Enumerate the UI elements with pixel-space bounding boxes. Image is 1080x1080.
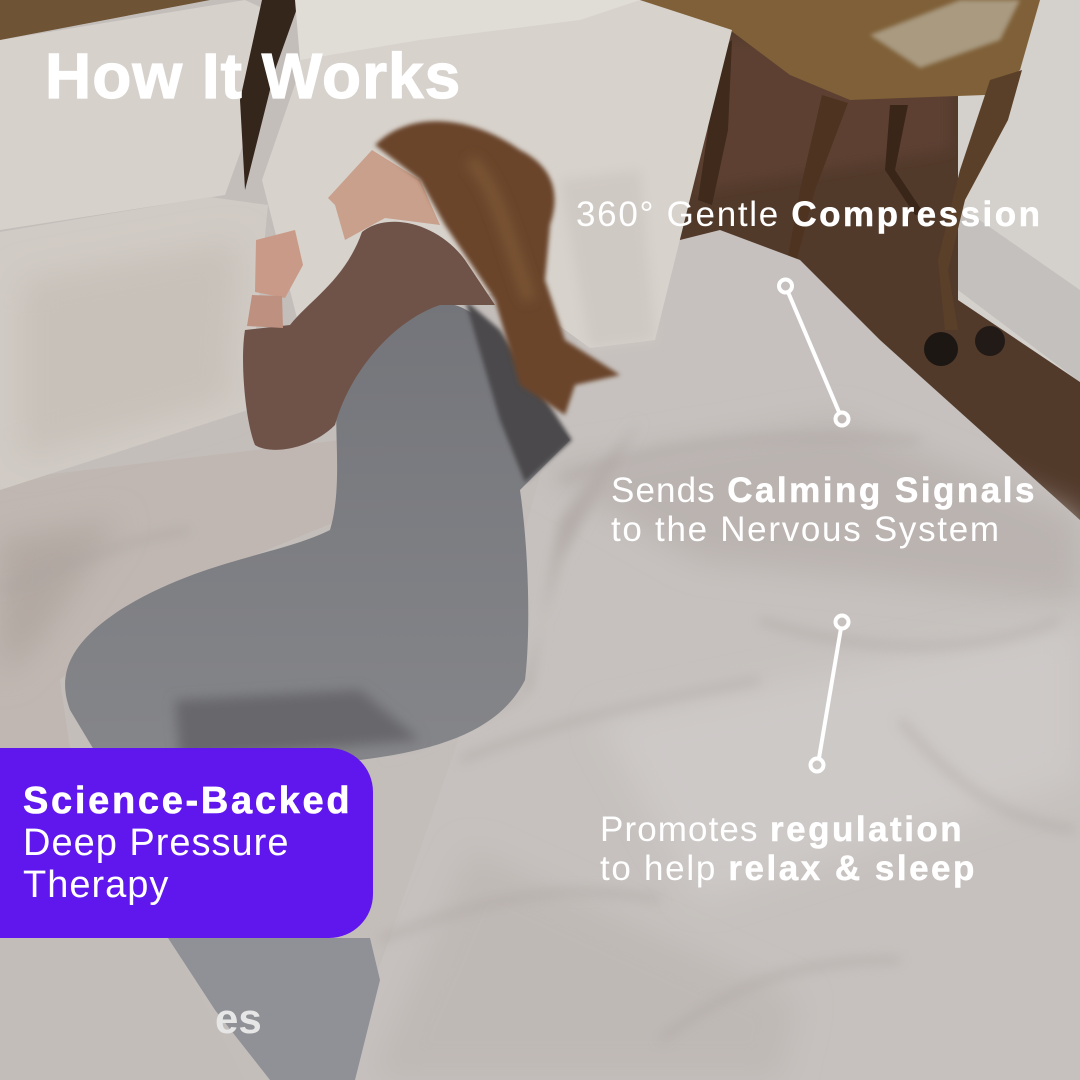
pillows <box>0 0 732 490</box>
step 1 text: 360° Gentle Compression <box>576 195 1043 234</box>
badge text: Therapy <box>23 864 169 906</box>
step 3 text: Promotes regulation <box>600 810 964 849</box>
body wrap: grey compression garment <box>65 300 572 1080</box>
purple badge <box>0 748 373 938</box>
connector line 2 <box>810 616 848 772</box>
sweater and arm <box>243 222 495 450</box>
garment logo: es <box>215 995 262 1042</box>
step 2 text <box>611 471 1037 549</box>
duvet wrinkles <box>0 437 1075 1040</box>
duvet <box>0 230 1080 1080</box>
badge text <box>23 780 352 906</box>
nightstand <box>640 0 1040 366</box>
badge text: Science-Backed <box>23 780 352 822</box>
hair <box>375 121 620 415</box>
step 3 text <box>600 810 977 888</box>
connector line 1 <box>779 280 848 426</box>
step 2 text: to the Nervous System <box>611 510 1001 549</box>
badge text: Deep Pressure <box>23 822 289 864</box>
step 2 text: Sends Calming Signals <box>611 471 1037 510</box>
step 3 text: to help relax & sleep <box>600 849 977 888</box>
hand and face <box>247 150 440 328</box>
title: How It Works <box>45 40 461 112</box>
